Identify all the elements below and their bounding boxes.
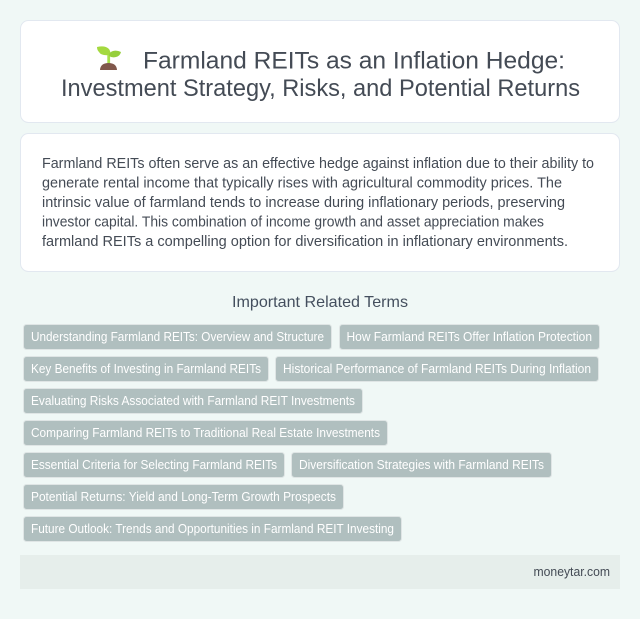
tag (24, 420, 388, 446)
tag (24, 324, 332, 350)
tag (276, 356, 598, 382)
tag: Key Benefits of Investing in Farmland REITs (31, 362, 261, 376)
tag list (24, 324, 600, 542)
tag: Potential Returns: Yield and Long-Term Growth Prospects (31, 490, 336, 504)
tag (24, 388, 362, 414)
tag (24, 484, 344, 510)
tag: Evaluating Risks Associated with Farmland REIT Investments (31, 394, 355, 408)
title (61, 48, 580, 102)
paragraph text: investor capital. This combination of income growth and asset appreciation makes (42, 214, 544, 230)
tag: Historical Performance of Farmland REITs During Inflation (283, 362, 591, 376)
tag: How Farmland REITs Offer Inflation Protection (346, 330, 592, 344)
tag (340, 324, 600, 350)
paragraph text: Farmland REITs often serve as an effective hedge against inflation due to their ability to (42, 156, 594, 172)
tag: Understanding Farmland REITs: Overview and Structure (31, 330, 324, 344)
paragraph text: intrinsic value of farmland tends to increase during inflationary periods, preserving (42, 195, 565, 211)
tag: Comparing Farmland REITs to Traditional Real Estate Investments (31, 426, 380, 440)
title: Investment Strategy, Risks, and Potential Returns (61, 75, 580, 102)
tag: Essential Criteria for Selecting Farmland REITs (31, 458, 277, 472)
tag (24, 516, 402, 542)
footer bar (20, 555, 620, 589)
tag: Future Outlook: Trends and Opportunities in Farmland REIT Investing (31, 522, 394, 536)
paragraph text: generate rental income that typically rises with agricultural commodity prices. The (42, 176, 562, 192)
paragraph text: farmland REITs a compelling option for diversification in inflationary environments. (42, 234, 568, 250)
tag (292, 452, 552, 478)
icon: sprout (97, 46, 121, 70)
paragraph text (42, 156, 594, 250)
footer text: moneytar.com (534, 565, 610, 579)
panel: summary paragraph (20, 134, 620, 272)
tag: Diversification Strategies with Farmland REITs (299, 458, 544, 472)
title: Farmland REITs as an Inflation Hedge: (143, 48, 565, 74)
heading: important related terms: Important Related Terms (232, 294, 408, 311)
tag (24, 356, 268, 382)
panel: header (20, 20, 620, 122)
tag (24, 452, 284, 478)
